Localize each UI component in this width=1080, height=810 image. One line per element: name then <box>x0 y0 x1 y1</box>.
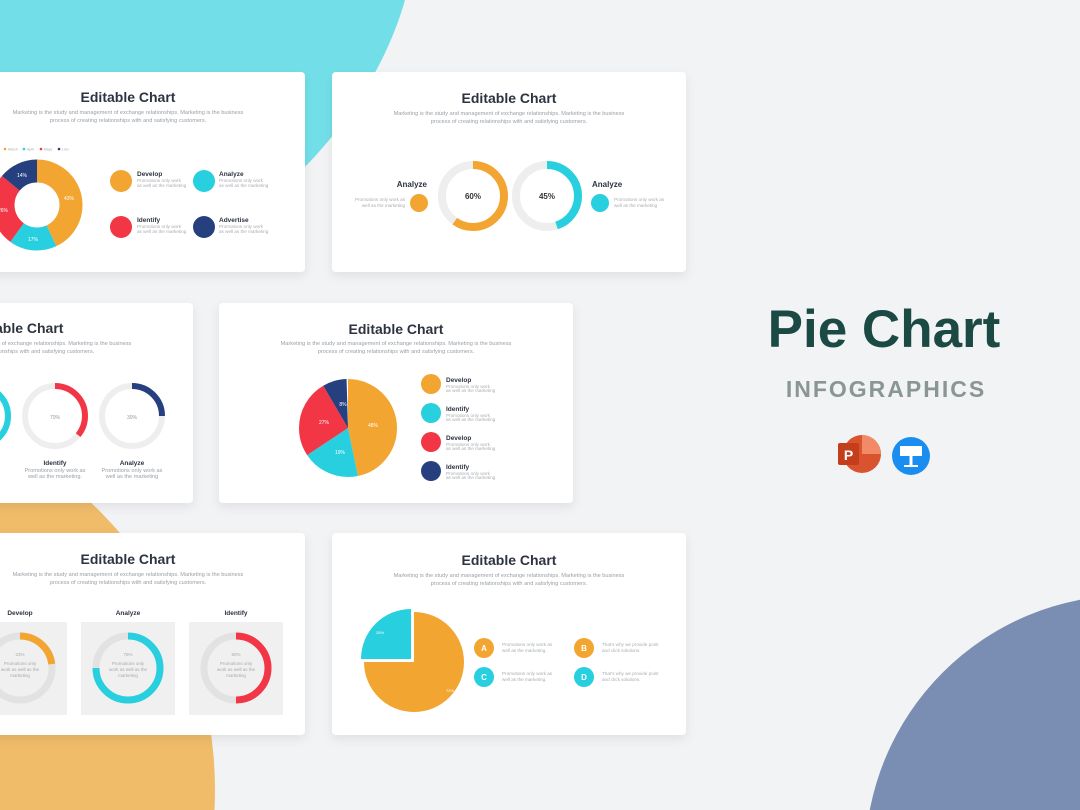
legend: Identify <box>446 464 469 471</box>
legend items: Promotions only work <box>219 178 264 183</box>
legend: B <box>581 644 587 653</box>
panel: pie chart card: 19% <box>335 450 346 456</box>
text block: Marketing is the study and management of exchange relationships. Marketing is the business <box>394 573 625 579</box>
panel: donut chart card: 43% <box>64 196 75 202</box>
donut chart <box>3 171 71 239</box>
subtitle: INFOGRAPHICS <box>786 376 986 402</box>
legend: Develop <box>446 377 471 384</box>
legend items: Analyze <box>219 171 244 178</box>
ring boxes: marketing <box>118 673 138 678</box>
panel: pie chart card: 48% <box>368 423 379 429</box>
legend items: Develop <box>137 171 162 178</box>
legend <box>474 638 659 687</box>
legend: Identify <box>446 406 469 413</box>
labels: Analyze <box>120 460 145 467</box>
legend items: Identify <box>137 217 160 224</box>
label right: Promotions only work as <box>614 197 665 202</box>
legend: Promotions only work <box>446 413 491 418</box>
legend: D <box>581 673 587 682</box>
rings <box>0 386 162 446</box>
ring boxes: marketing <box>10 673 30 678</box>
legend: Mays <box>44 148 53 152</box>
ring boxes: Promotions only <box>220 661 253 666</box>
text block: Marketing is the study and management of exchange relationships. Marketing is the business <box>13 110 244 116</box>
ring boxes: Promotions only <box>112 661 145 666</box>
background blob: cyan <box>0 0 405 262</box>
ring boxes: 75% <box>123 652 133 657</box>
legend: Lion <box>62 148 69 152</box>
ring: 60% <box>442 165 504 227</box>
labels: Promotions only work as <box>102 468 163 474</box>
ring: 45%: 45% <box>539 192 555 201</box>
pie chart <box>324 404 372 452</box>
ring boxes <box>0 622 283 715</box>
legend items: Promotions only work <box>219 224 264 229</box>
legend <box>4 148 69 152</box>
panel: three ring card <box>0 303 193 503</box>
text block <box>0 341 132 355</box>
ring boxes: 50% <box>231 652 241 657</box>
legend items: Promotions only work <box>137 224 182 229</box>
ring boxes: work as well as the <box>1 667 40 672</box>
text block: Marketing is the study and management of exchange relationships. Marketing is the business <box>281 341 512 347</box>
background blob: navy <box>865 595 1080 810</box>
labels: well as the marketing <box>105 474 158 480</box>
text block: process of creating relationships with and satisfying customers. <box>50 118 207 124</box>
label left: well as the marketing <box>362 203 405 208</box>
exploded pie: 28% <box>376 630 384 635</box>
column labels: Analyze <box>116 610 141 617</box>
legend: Promotions only work <box>446 384 491 389</box>
heading: Editable Chart <box>81 551 176 567</box>
legend: and click solutions. <box>602 677 641 682</box>
text block: process of creating relationships with and satisfying customers. <box>431 581 588 587</box>
legend: Promotions only work <box>446 471 491 476</box>
legend: Promotions only work <box>446 442 491 447</box>
icon: keynote <box>892 437 930 475</box>
panel: pie chart card: 27% <box>319 420 330 426</box>
labels: well as the marketing. <box>27 474 82 480</box>
text block <box>13 572 244 586</box>
labels <box>0 460 163 480</box>
text block: process of creating relationships with and satisfying customers. <box>431 119 588 125</box>
heading: Editable Chart <box>462 90 557 106</box>
ring boxes: work as well as the <box>217 667 256 672</box>
legend items: Advertise <box>219 217 249 224</box>
panel: two ring card <box>332 72 686 272</box>
ring boxes: 23% <box>15 652 25 657</box>
legend items: as well as the marketing <box>219 229 269 234</box>
panel: donut chart card: 14% <box>17 173 28 179</box>
text block <box>13 110 244 124</box>
exploded pie: 72% <box>446 688 454 693</box>
legend: A <box>481 644 487 653</box>
ring boxes: marketing <box>226 673 246 678</box>
text block <box>394 111 625 125</box>
legend: Develop <box>446 435 471 442</box>
title: Pie Chart <box>768 300 1000 359</box>
icon: powerpoint: P <box>844 447 853 463</box>
heading: Editable Chart <box>462 552 557 568</box>
label left <box>355 180 428 212</box>
labels: Identify <box>43 460 67 467</box>
legend: Promotions only work as <box>502 671 553 676</box>
rings: 30% <box>127 415 138 421</box>
legend: as well as the marketing <box>446 446 496 451</box>
heading: Editable Chart <box>349 321 444 337</box>
icon: powerpoint <box>838 435 881 473</box>
legend items: as well as the marketing <box>137 183 187 188</box>
panel: boxed rings card <box>0 533 305 735</box>
legend: C <box>481 673 487 682</box>
label right <box>591 180 665 212</box>
background blob: orange <box>0 395 215 810</box>
heading: Editable Chart <box>81 89 176 105</box>
text block: process of creating relationships with and satisfying customers. <box>318 349 475 355</box>
legend <box>421 374 496 481</box>
legend: as well as the marketing <box>446 417 496 422</box>
legend: March <box>8 148 18 152</box>
legend: That's why we provide point <box>602 642 659 647</box>
legend: as well as the marketing <box>446 388 496 393</box>
legend items <box>110 170 269 238</box>
rings: 70% <box>50 415 61 421</box>
panel: pie chart card <box>219 303 573 503</box>
exploded pie <box>361 609 464 712</box>
legend: well as the marketing. <box>502 677 546 682</box>
column labels <box>7 610 248 617</box>
legend: Promotions only work as <box>502 642 553 647</box>
ring: 45% <box>516 165 578 227</box>
legend: well as the marketing. <box>502 648 546 653</box>
panel: pie chart card: 8% <box>339 402 347 408</box>
text block: process of creating relationships with and satisfying customers. <box>50 580 207 586</box>
text block: Marketing is the study and management of exchange relationships. Marketing is the business <box>13 572 244 578</box>
legend: April <box>27 148 34 152</box>
labels: Promotions only work as <box>25 468 86 474</box>
legend: as well as the marketing <box>446 475 496 480</box>
label right: Analyze <box>592 180 623 189</box>
text block: Marketing is the study and management of exchange relationships. Marketing is the business <box>394 111 625 117</box>
panel: donut chart card <box>0 72 305 272</box>
legend items: Promotions only work <box>137 178 182 183</box>
ring: 60%: 60% <box>465 192 481 201</box>
legend items: as well as the marketing <box>137 229 187 234</box>
text block <box>281 341 512 355</box>
text block <box>394 573 625 587</box>
legend: That's why we provide point <box>602 671 659 676</box>
panel: donut chart card: 17% <box>28 237 39 243</box>
label left: Analyze <box>397 180 428 189</box>
legend: and click solutions. <box>602 648 641 653</box>
ring boxes: Promotions only <box>4 661 37 666</box>
label left: Promotions only work as <box>355 197 406 202</box>
ring boxes: work as well as the <box>109 667 148 672</box>
label right: well as the marketing <box>614 203 658 208</box>
column labels: Identify <box>224 610 248 617</box>
legend items: as well as the marketing <box>219 183 269 188</box>
column labels: Develop <box>7 610 33 617</box>
panel: exploded pie card <box>332 533 686 735</box>
